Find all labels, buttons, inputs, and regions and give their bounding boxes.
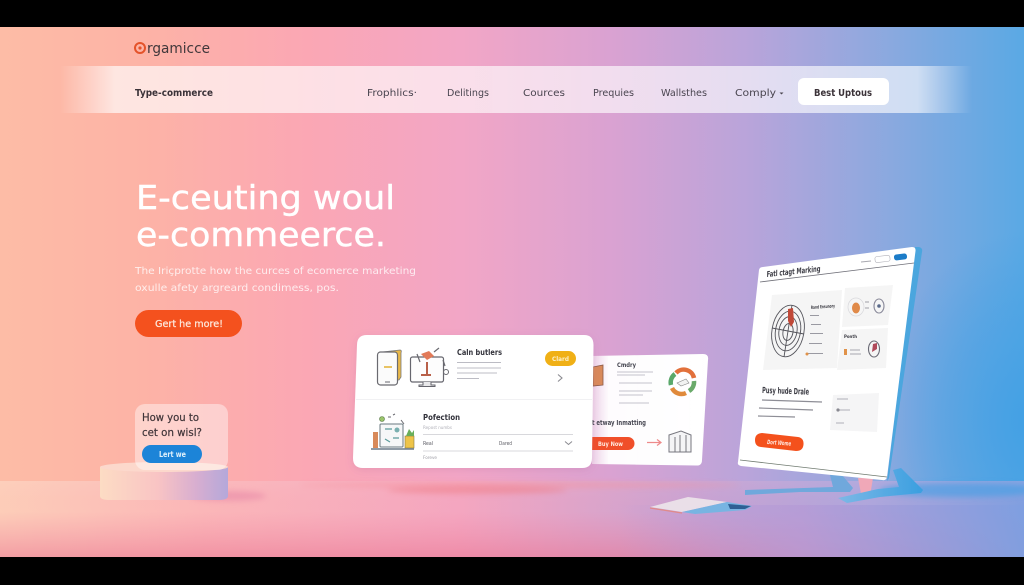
- hero description: oxulle afety argreard condimess, pos.: [135, 283, 339, 294]
- screen button: Dort Wome: [767, 439, 791, 448]
- nav button: [798, 78, 889, 105]
- small panel bottom: [837, 328, 888, 370]
- brand label: Type-commerce: [135, 88, 213, 99]
- screen title: Fatl ctagt Marking: [766, 264, 821, 279]
- orange button: Buy Now: [598, 440, 623, 448]
- navigation bar: [60, 66, 972, 113]
- question card: How you to: [142, 411, 199, 424]
- arrow: [647, 440, 661, 446]
- form rows: Real: [423, 441, 433, 447]
- form placeholder: Repost numbs: [423, 425, 453, 431]
- computer icon: [410, 348, 448, 386]
- phone icon: [378, 350, 401, 385]
- hero description: [134, 266, 416, 294]
- nav links: Cources: [523, 88, 565, 99]
- question card: cet on wisl?: [142, 426, 202, 439]
- small panel top: [842, 285, 893, 327]
- screen bottom rule: [740, 460, 887, 477]
- keyboard: [650, 497, 752, 514]
- hero heading: e-commeerce.: [136, 215, 386, 254]
- logo: rgamicce: [147, 41, 210, 57]
- right leg: [838, 468, 923, 503]
- panel: back card: [590, 354, 708, 466]
- yellow badge: [545, 351, 576, 366]
- nav links: Wallsthes: [661, 88, 707, 99]
- front card content: [356, 348, 592, 461]
- form title: Pofection: [423, 413, 460, 422]
- nav links: Comply: [735, 88, 776, 99]
- nav links: [367, 88, 784, 99]
- nav button: Best Uptous: [814, 88, 872, 99]
- screen paragraph: [758, 400, 822, 417]
- form panel: [830, 393, 879, 432]
- card text: [457, 362, 501, 378]
- card subheading: t etway Inmatting: [592, 419, 646, 427]
- hero button: [135, 310, 242, 337]
- monitor: [738, 247, 922, 481]
- chevron: [558, 374, 562, 382]
- screen top rule: [760, 263, 914, 282]
- nav links: Frophlics·: [367, 88, 417, 99]
- white screen: [738, 247, 916, 480]
- blue side: [887, 247, 922, 481]
- divider: [356, 398, 592, 400]
- text lines: [617, 372, 653, 403]
- desk illustration icon: [371, 414, 414, 449]
- ring chart icon: [671, 370, 694, 394]
- hero description: The Iriçprotte how the curces of ecomerce marketing: [134, 266, 416, 277]
- neck: [858, 478, 873, 499]
- yellow badge: Clard: [552, 355, 569, 363]
- nav links: Prequies: [593, 88, 634, 99]
- small panel bottom: Ponth: [844, 334, 857, 340]
- panel: front card: [353, 335, 594, 468]
- form rows: Dared: [499, 441, 512, 447]
- screen nav: [861, 253, 907, 263]
- left foot: [745, 475, 853, 495]
- orange box icon: [593, 365, 603, 386]
- nav links: Delitings: [447, 88, 489, 99]
- radar legend: Rand Ensunory: [811, 303, 835, 311]
- screen button: [755, 433, 804, 451]
- hero heading: E-ceuting woul: [136, 178, 395, 217]
- form rows: Foreve: [423, 455, 437, 461]
- hero heading: [136, 178, 395, 254]
- monitor stand: [745, 468, 923, 503]
- building icon: [669, 431, 691, 452]
- pedestal: [100, 462, 266, 501]
- question card: [135, 404, 228, 470]
- hero button: Gert he more!: [155, 319, 223, 330]
- radar panel: [763, 290, 842, 370]
- card button: Lert we: [159, 450, 186, 459]
- card title: Cmdry: [617, 361, 637, 369]
- card title: Caln butlers: [457, 348, 502, 357]
- screen subheading: Pusy hude Drale: [762, 386, 809, 398]
- form rows: [423, 434, 573, 461]
